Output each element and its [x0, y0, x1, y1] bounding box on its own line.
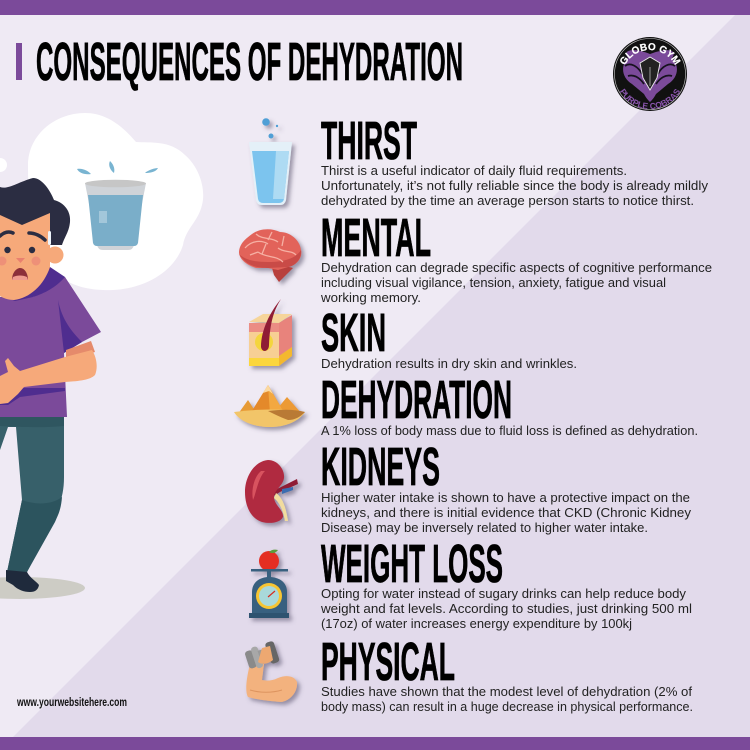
logo: Globo Gym Purple Cobras: GLOBO GYM	[620, 43, 681, 65]
text block: Higher water intake is shown to have a protective impact on the	[321, 490, 690, 505]
icon: brain	[239, 229, 301, 282]
text block: Opting for water instead of sugary drinks can help reduce body	[321, 586, 686, 601]
panel: mental	[239, 208, 712, 305]
text block: Unfortunately, it’s not fully reliable since the body is already mildly	[321, 178, 708, 193]
bottom bar	[0, 737, 750, 750]
text block: including visual vigilance, tension, anxiety, fatigue and visual	[321, 275, 666, 290]
icon: desert pyramids	[234, 385, 305, 427]
text block	[320, 260, 712, 305]
text block	[321, 490, 691, 535]
text block: Thirst is a useful indicator of daily fluid requirements.	[321, 163, 627, 178]
panel: skin	[249, 299, 577, 371]
icon: glass of water	[249, 118, 292, 205]
icon: skin cross-section	[249, 299, 292, 366]
logo: Globo Gym Purple Cobras	[613, 37, 687, 111]
panel: kidneys: KIDNEYS	[321, 437, 440, 497]
text block	[321, 684, 693, 714]
text block: (17oz) of water increases energy expenditure by 100kj	[321, 616, 632, 631]
text block: Dehydration can degrade specific aspects of cognitive performance	[321, 260, 712, 275]
panel: dehydration	[234, 370, 698, 438]
text block	[320, 586, 692, 631]
icon: apple on scale	[249, 550, 289, 618]
panel: weight loss	[249, 534, 692, 631]
panel: weight loss: WEIGHT LOSS	[321, 534, 503, 594]
heading: SKIN	[321, 303, 386, 363]
panel: physical	[244, 632, 693, 714]
top bar	[0, 0, 750, 15]
illustration: thought bubble with glass of water	[0, 113, 203, 290]
panel: thirst: THIRST	[321, 111, 417, 171]
illustration: person with stomach ache	[0, 178, 101, 599]
title	[16, 32, 463, 92]
text block: dehydrated by the time an average person starts to notice thirst.	[321, 193, 694, 208]
panel: physical: PHYSICAL	[321, 632, 455, 692]
panel: kidneys	[245, 437, 691, 535]
text block: Dehydration results in dry skin and wrinkles.	[321, 356, 577, 371]
icon: kidney	[245, 460, 298, 523]
panel: thirst	[249, 111, 708, 208]
text block: A 1% loss of body mass due to fluid loss is defined as dehydration.	[321, 423, 698, 438]
text block: Disease) may be inversely related to higher water intake.	[321, 520, 648, 535]
panel: dehydration: DEHYDRATION	[321, 370, 512, 430]
text block: kidneys, and there is initial evidence that CKD (Chronic Kidney	[321, 505, 691, 520]
text block: body mass) can result in a huge decrease in physical performance.	[321, 699, 693, 714]
text block	[321, 163, 708, 208]
panel: mental: MENTAL	[321, 208, 431, 268]
text block: Studies have shown that the modest level of dehydration (2% of	[321, 684, 692, 699]
text block: weight and fat levels. According to studies, just drinking 500 ml	[320, 601, 692, 616]
website url: www.yourwebsitehere.com	[16, 695, 127, 709]
icon: arm with dumbbell	[244, 641, 297, 702]
logo: Globo Gym Purple Cobras: PURPLE COBRAS	[620, 88, 680, 109]
text block: working memory.	[320, 290, 421, 305]
